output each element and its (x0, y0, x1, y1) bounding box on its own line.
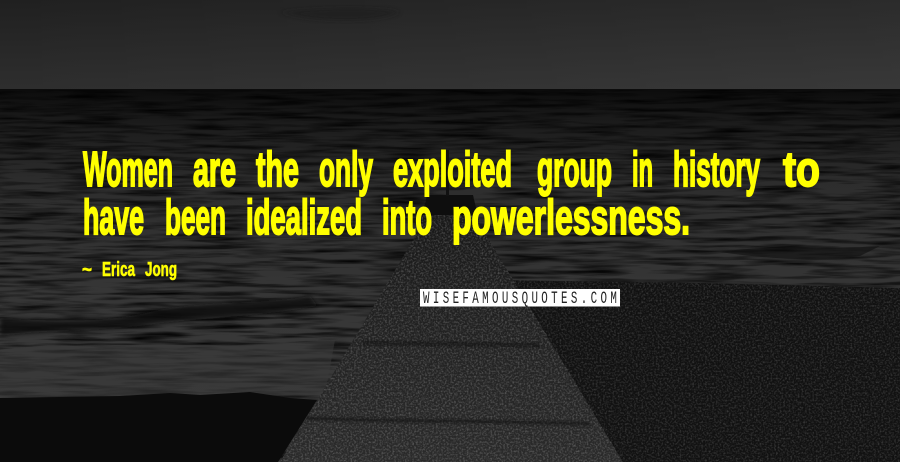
quote line 1: Women (83, 143, 173, 197)
quote line 1: are (193, 143, 236, 197)
quote line 1: only (319, 143, 373, 197)
quote line 1 (83, 143, 820, 197)
watermark badge: WISEFAMOUSQUOTES.COM (423, 290, 617, 309)
quote line 2: powerlessness. (452, 191, 690, 245)
quote line 1: exploited (393, 143, 512, 197)
author attribution: ~ (82, 259, 92, 281)
quote line 2: idealized (246, 191, 362, 245)
quote line 2: been (165, 191, 226, 245)
quote text (83, 143, 820, 245)
quote line 1: history (673, 143, 760, 197)
quote line 1: to (783, 143, 820, 197)
author attribution: Erica (102, 259, 136, 281)
author attribution: Jong (145, 259, 177, 281)
background: sky (0, 0, 900, 89)
quote line 2: have (83, 191, 144, 245)
background: beach (514, 280, 900, 462)
background: pier (270, 150, 630, 462)
background: dark shore (0, 392, 317, 462)
quote line 1: group (537, 143, 612, 197)
quote line 2 (83, 191, 690, 245)
quote line 1: in (632, 143, 653, 197)
quote line 2: into (382, 191, 432, 245)
author attribution (82, 259, 177, 281)
quote line 1: the (256, 143, 299, 197)
